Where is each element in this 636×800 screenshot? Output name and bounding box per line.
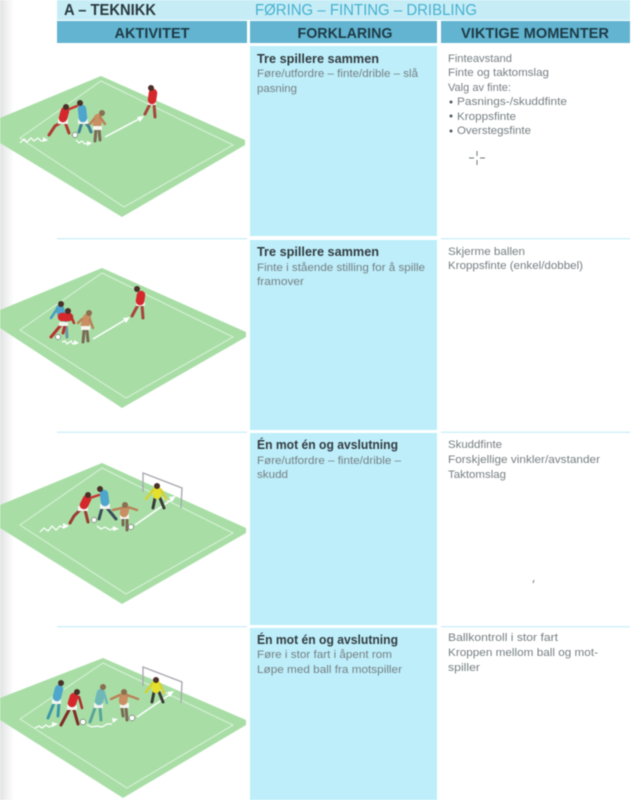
top banner bbox=[57, 0, 630, 20]
row 4 explanation: Løpe med ball fra motspiller bbox=[257, 664, 402, 676]
column headers: VIKTIGE MOMENTER bbox=[461, 25, 609, 42]
blue player bbox=[51, 301, 67, 337]
goal bbox=[143, 667, 182, 703]
row 3 explanation bbox=[257, 437, 401, 481]
row 4 key points: Ballkontroll i stor fart bbox=[448, 632, 558, 644]
brown player bbox=[113, 502, 137, 530]
goalkeeper bbox=[146, 677, 164, 702]
row 3 diagram bbox=[0, 463, 246, 604]
blue player bbox=[48, 680, 64, 718]
blue player bbox=[97, 486, 116, 519]
row 2 explanation: framover bbox=[257, 276, 304, 288]
pitch bbox=[0, 76, 245, 217]
row 2 explanation: Finte i stående stilling for å spille bbox=[257, 262, 425, 274]
ball bbox=[129, 715, 135, 721]
brown player bbox=[111, 689, 138, 720]
row 1 key points bbox=[448, 53, 567, 137]
brown player bbox=[90, 110, 105, 141]
receiving red player bbox=[145, 85, 156, 117]
ball bbox=[80, 719, 86, 725]
row 4 explanation bbox=[257, 632, 402, 676]
receiving red player bbox=[132, 286, 145, 318]
row 1 explanation: Føre/utfordre – finte/drible – slå bbox=[257, 68, 418, 80]
goal bbox=[143, 473, 182, 508]
blue player bbox=[77, 100, 91, 132]
red player bbox=[49, 104, 77, 135]
ball bbox=[72, 132, 78, 138]
row 2 key points bbox=[448, 246, 583, 272]
row 1 diagram bbox=[0, 76, 245, 217]
movement arrows bbox=[40, 496, 176, 532]
row 2 key points: Kroppsfinte (enkel/dobbel) bbox=[448, 260, 583, 272]
topic title: FØRING – FINTING – DRIBLING bbox=[255, 2, 477, 19]
row 1 explanation: Tre spillere sammen bbox=[257, 52, 379, 66]
pitch bbox=[0, 658, 246, 798]
row 3 explanation: Føre/utfordre – finte/drible – bbox=[257, 455, 401, 467]
row 2 explanation bbox=[257, 245, 425, 288]
row 4 explanation: Én mot én og avslutning bbox=[257, 632, 398, 647]
row 1 key points: Finteavstand bbox=[448, 53, 512, 65]
goalkeeper bbox=[146, 483, 166, 508]
second blue player bbox=[90, 684, 107, 722]
red player bbox=[61, 689, 82, 725]
row 1 key points: Overstegsfinte bbox=[457, 125, 531, 137]
row 4 diagram bbox=[0, 658, 246, 798]
row 4 key points: Kroppen mellom ball og mot- bbox=[448, 647, 598, 659]
row 3 key points bbox=[448, 439, 600, 481]
row 1 key points: Pasnings-/skuddfinte bbox=[457, 96, 567, 108]
row 1 explanation bbox=[257, 52, 418, 95]
explanation column panels bbox=[250, 46, 437, 800]
red player bbox=[51, 308, 74, 337]
row 2 explanation: Tre spillere sammen bbox=[257, 245, 379, 259]
ball bbox=[91, 517, 97, 523]
row 1 key points: Kroppsfinte bbox=[457, 111, 516, 123]
section title: A – TEKNIKK bbox=[64, 2, 157, 19]
row 3 key points: Taktomslag bbox=[448, 469, 506, 481]
row 3 key points: Forskjellige vinkler/avstander bbox=[448, 454, 600, 466]
red player bbox=[70, 492, 99, 523]
row 3 explanation: Én mot én og avslutning bbox=[257, 437, 398, 452]
movement arrows bbox=[20, 116, 144, 146]
row 2 key points: Skjerme ballen bbox=[448, 246, 525, 258]
ball bbox=[55, 334, 61, 340]
small speck bbox=[533, 580, 534, 583]
row 4 key points: spiller bbox=[448, 662, 480, 674]
pitch bbox=[0, 268, 246, 408]
row 1 key points: Finte og taktomslag bbox=[448, 67, 549, 79]
movement arrows bbox=[62, 317, 130, 345]
row 4 key points bbox=[448, 632, 598, 674]
crosshair mark bbox=[469, 151, 485, 165]
row 2 diagram bbox=[0, 268, 246, 408]
ball bbox=[128, 524, 134, 530]
brown player bbox=[78, 310, 93, 342]
row 4 explanation: Føre i stor fart i åpent rom bbox=[257, 649, 392, 661]
movement arrows bbox=[35, 691, 174, 728]
row 3 key points: Skuddfinte bbox=[448, 439, 502, 451]
column headers: FORKLARING bbox=[298, 25, 392, 42]
row 1 key points: Valg av finte: bbox=[448, 82, 511, 94]
column headers bbox=[57, 21, 630, 43]
row 3 explanation: skudd bbox=[257, 469, 288, 481]
pitch bbox=[0, 463, 246, 604]
column headers: AKTIVITET bbox=[114, 25, 190, 42]
row 1 explanation: pasning bbox=[257, 83, 297, 95]
